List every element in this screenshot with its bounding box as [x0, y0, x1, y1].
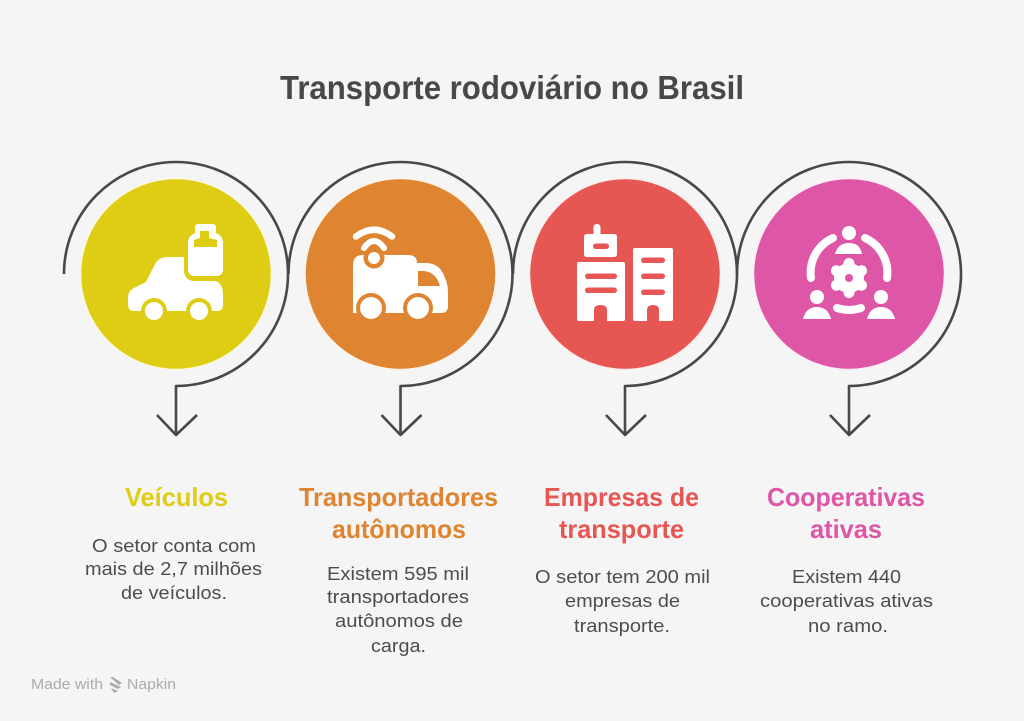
- text: cooperativas description: no ramo.: [808, 615, 888, 636]
- text: cooperativas description: Existem 440: [792, 566, 901, 587]
- panel: veículos: [64, 162, 288, 603]
- panel: empresas de transporte: [513, 162, 737, 636]
- text: empresas description: transporte.: [574, 615, 670, 636]
- icon: buildings: [577, 224, 673, 321]
- text: empresas description: O setor tem 200 mil: [535, 566, 710, 587]
- arrow: empresas spiral: [513, 162, 737, 435]
- circle: cooperativas: [754, 178, 944, 370]
- text: veículos description: mais de 2,7 milhões: [85, 558, 262, 579]
- text: transportadores description: [327, 563, 469, 656]
- heading: empresas de transporte: transporte: [559, 514, 684, 544]
- title: Transporte rodoviário no Brasil: [280, 69, 744, 106]
- heading: cooperativas ativas: Cooperativas: [767, 482, 925, 512]
- heading: cooperativas ativas: [767, 482, 925, 544]
- circle: transportadores: [305, 178, 496, 370]
- panel: transportadores autônomos: [288, 162, 512, 656]
- footer: made with napkin: [31, 676, 176, 693]
- arrow: veículos spiral: [64, 162, 288, 435]
- footer: made with napkin: Napkin: [127, 676, 176, 693]
- icon: napkin logo: [110, 677, 122, 693]
- text: veículos description: [85, 535, 262, 603]
- arrow: transportadores spiral: [288, 162, 512, 435]
- heading: empresas de transporte: Empresas de: [544, 482, 699, 512]
- text: empresas description: empresas de: [565, 590, 680, 611]
- text: transportadores description: carga.: [371, 635, 426, 656]
- icon: car with battery: [122, 224, 228, 324]
- heading: transportadores autônomos: [299, 482, 498, 544]
- text: transportadores description: Existem 595 mil: [327, 563, 469, 584]
- circle: veículos: [80, 178, 272, 370]
- circle: empresas: [530, 178, 720, 370]
- text: transportadores description: transportadores: [327, 586, 469, 607]
- icon: connected truck: [353, 230, 448, 326]
- footer: made with napkin: Made with: [31, 676, 103, 693]
- text: transportadores description: autônomos de: [335, 610, 463, 631]
- heading: empresas de transporte: [544, 482, 699, 544]
- text: veículos description: O setor conta com: [92, 535, 256, 556]
- text: cooperativas description: [760, 566, 933, 636]
- text: veículos description: de veículos.: [121, 582, 227, 603]
- text: cooperativas description: cooperativas ativas: [760, 590, 933, 611]
- heading: cooperativas ativas: ativas: [810, 514, 882, 544]
- heading: veículos: Veículos: [125, 482, 228, 512]
- icon: cooperative people and gear: [803, 226, 895, 319]
- panel: cooperativas ativas: [737, 162, 961, 636]
- text: empresas description: [535, 566, 710, 636]
- heading: transportadores autônomos: autônomos: [332, 514, 466, 544]
- arrow: cooperativas spiral: [737, 162, 961, 435]
- heading: transportadores autônomos: Transportadores: [299, 482, 498, 512]
